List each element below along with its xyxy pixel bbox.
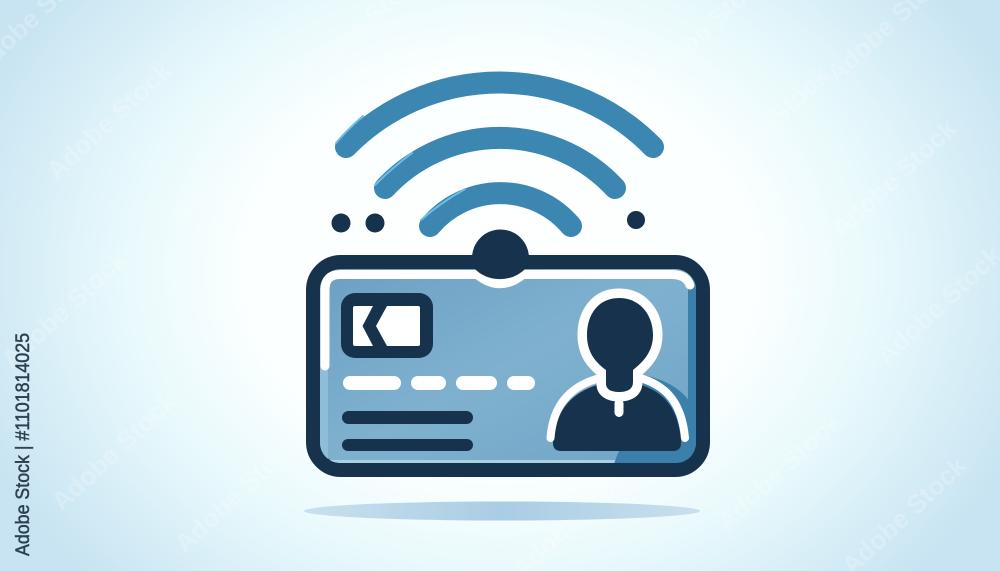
watermark pattern: Adobe Stock [209, 231, 346, 362]
watermark pattern: Adobe Stock [699, 60, 836, 191]
id card [313, 230, 703, 470]
card darker shading [320, 269, 698, 464]
arc highlights [336, 116, 465, 220]
icon: signal dots [332, 211, 645, 232]
card body [313, 262, 703, 470]
watermark pattern: Adobe Stock [169, 428, 306, 559]
person portrait [550, 298, 685, 451]
card inner white highlight [325, 274, 690, 366]
middle arc [385, 138, 615, 188]
head outline [587, 298, 653, 392]
watermark pattern: Adobe Stock [711, 406, 848, 537]
text lines [342, 411, 473, 451]
inner arc [430, 193, 571, 226]
head [587, 298, 653, 392]
watermark pattern: Adobe Stock [376, 398, 513, 529]
body outline [550, 378, 685, 438]
watermark pattern: Adobe Stock [826, 113, 963, 244]
watermark pattern: Adobe Stock [46, 386, 183, 517]
watermark pattern: Adobe Stock [668, 273, 805, 404]
watermark pattern: Adobe Stock [41, 55, 178, 186]
ground shadow [304, 502, 700, 520]
stock id label: Adobe Stock | #1101814025 [13, 333, 34, 556]
icon: wifi signal arcs [336, 83, 653, 226]
card hanging bump [472, 230, 529, 279]
body [553, 384, 681, 451]
watermark pattern: Adobe Stock [168, 98, 305, 229]
outer arc [346, 83, 653, 147]
neck tick [614, 399, 624, 417]
dashed id number [343, 376, 535, 390]
chip icon [341, 293, 433, 358]
